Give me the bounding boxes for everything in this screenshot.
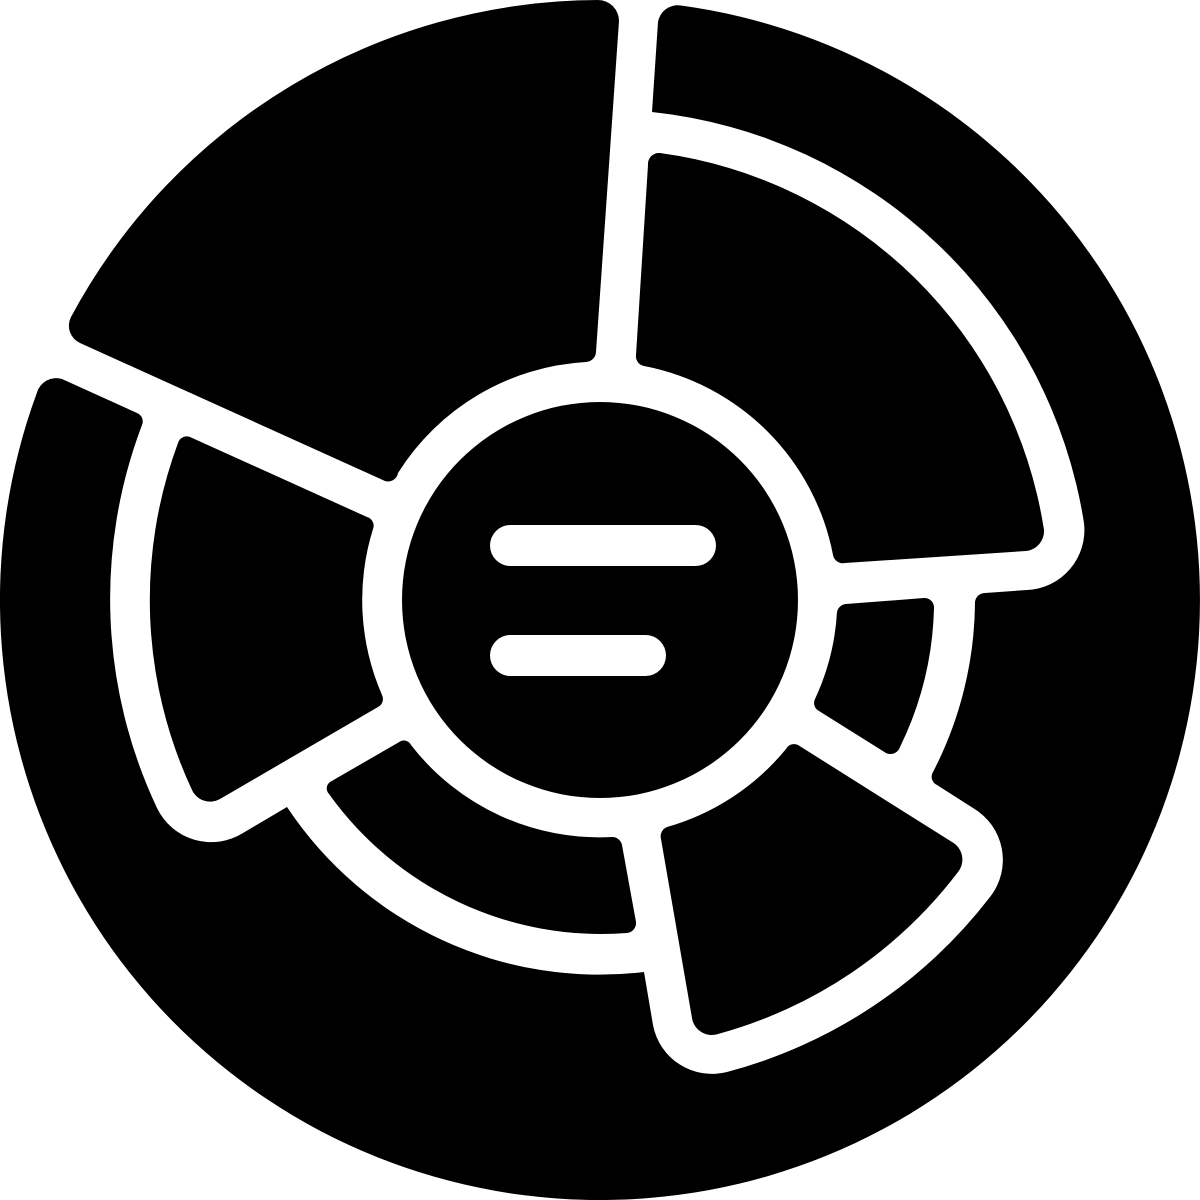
- center circle with lines: [402, 402, 798, 798]
- small right wedge: [814, 598, 934, 754]
- top-left wedge: [69, 0, 619, 481]
- top-right wedge: [636, 153, 1044, 563]
- bottom wedge: [327, 740, 636, 934]
- left wedge: [150, 436, 383, 802]
- bottom-right wedge: [661, 744, 962, 1035]
- upper text line: [490, 525, 716, 566]
- center disc: [402, 402, 798, 798]
- lower text line: [490, 635, 666, 676]
